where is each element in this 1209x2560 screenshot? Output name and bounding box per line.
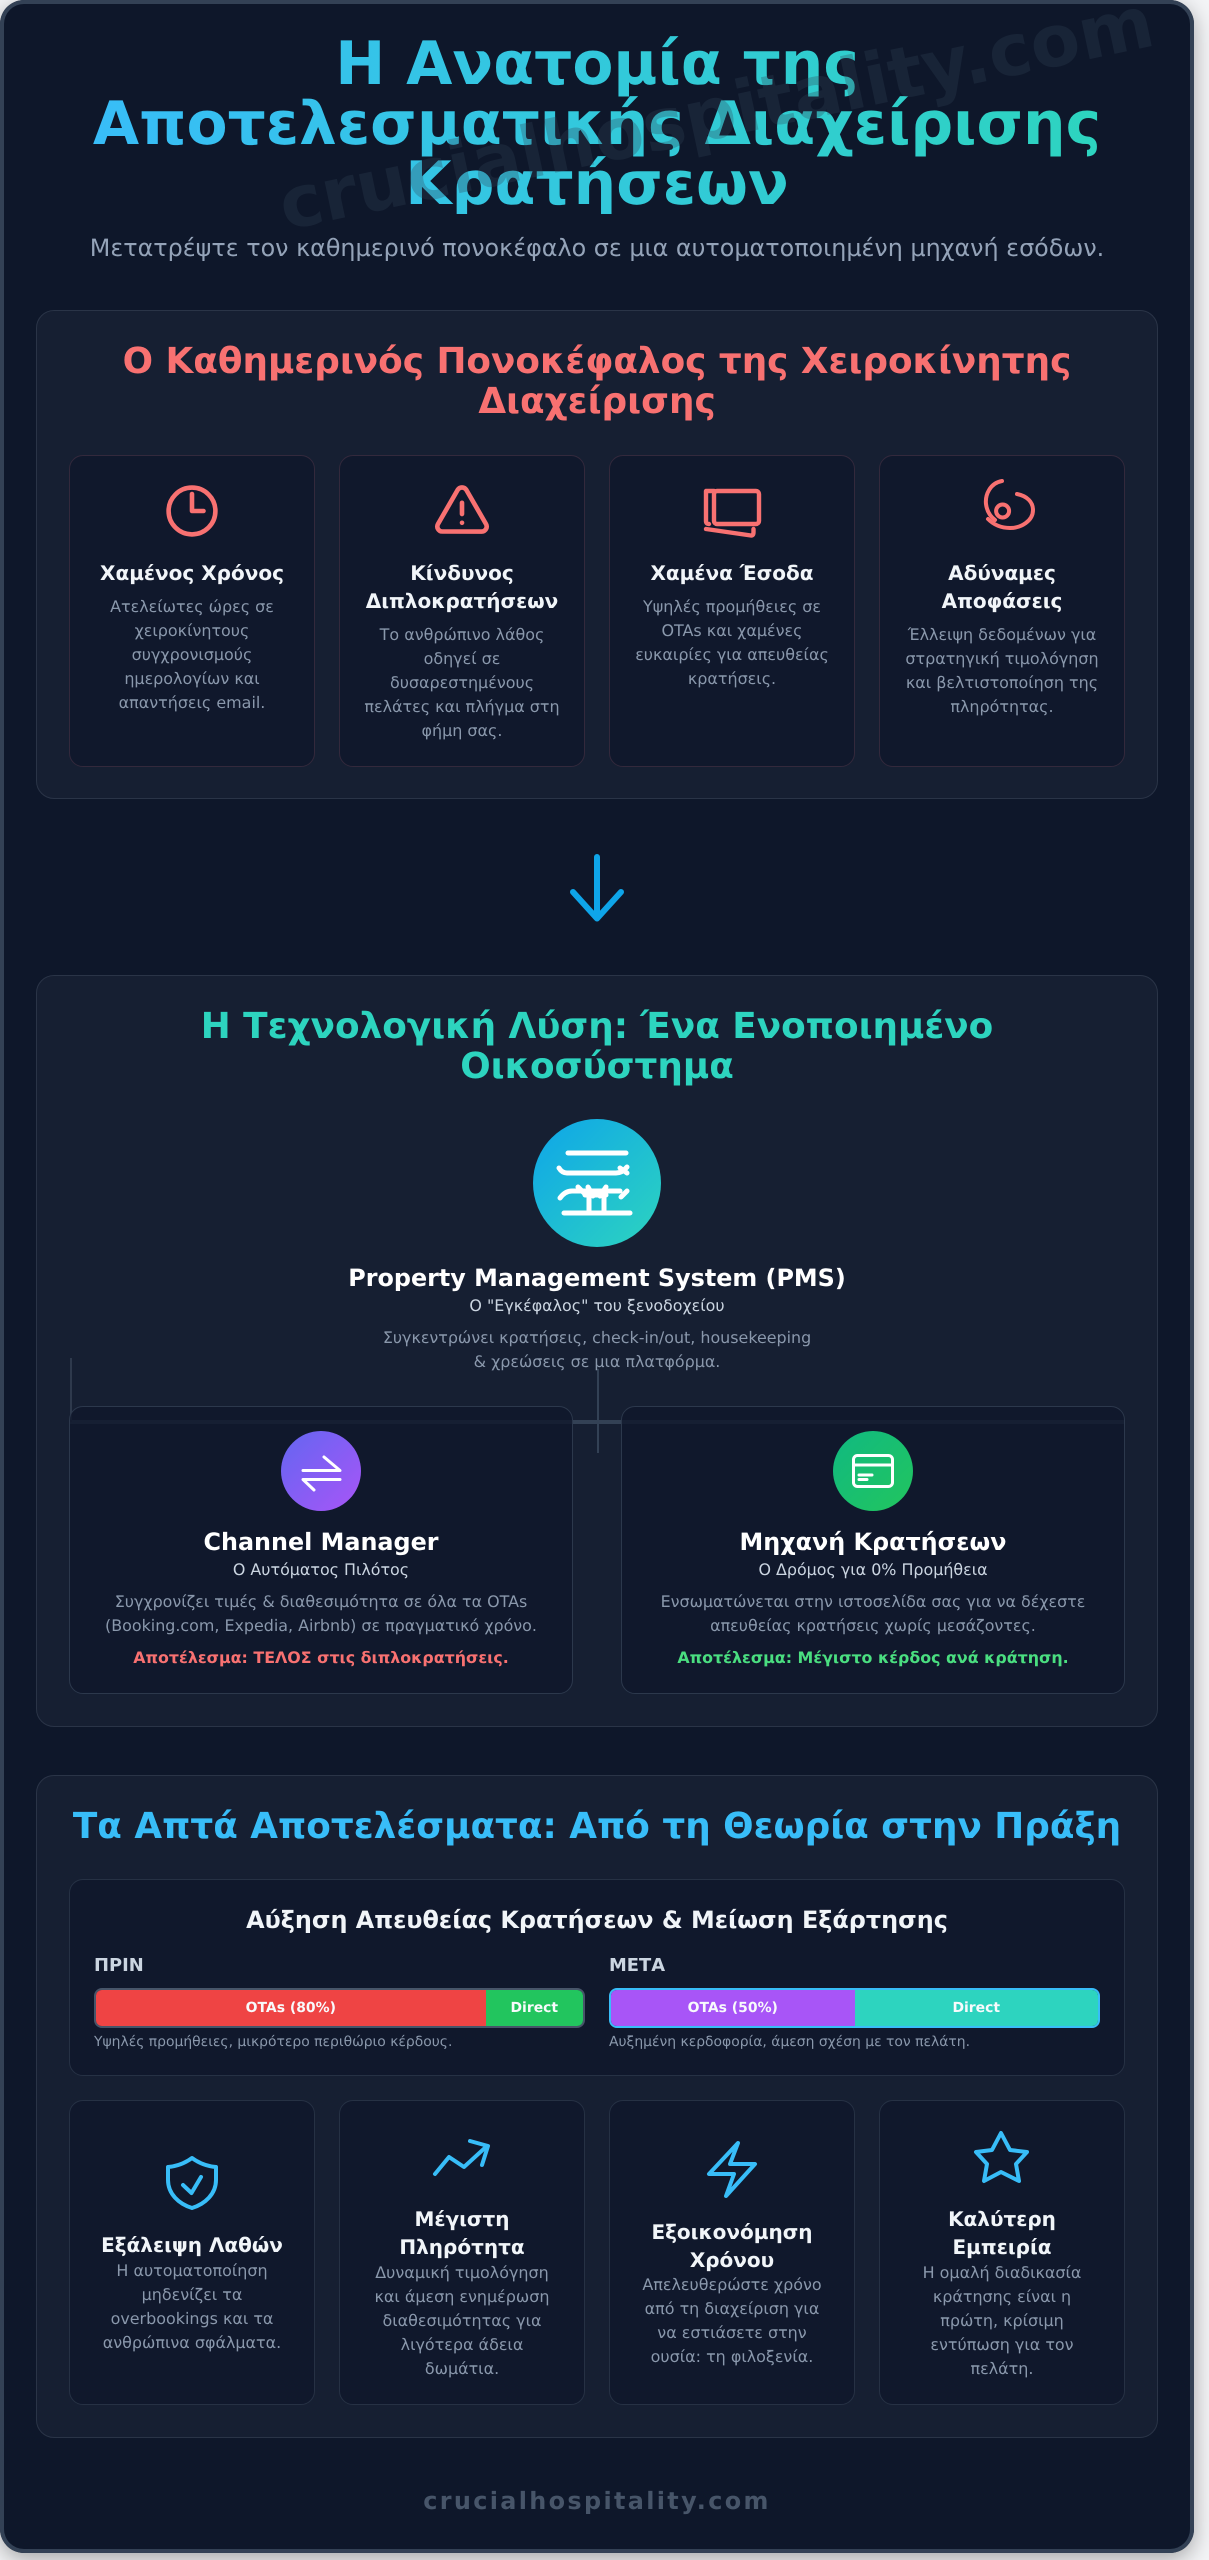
icon: stacked notes: [704, 488, 762, 538]
channel manager description: (Booking.com, Expedia, Airbnb) σε πραγματικό χρόνο.: [105, 1616, 537, 1635]
heading: tangible results: Τα Απτά Αποτελέσματα: Από τη Θεωρία στην Πράξη: [73, 1806, 1121, 1847]
card text: να εστιάσετε στην: [657, 2323, 807, 2342]
heading: technology solution: Οικοσύστημα: [460, 1046, 734, 1087]
card text: οδηγεί σε: [424, 649, 500, 668]
icon: shield check: [166, 2156, 218, 2210]
card text: [103, 2261, 281, 2352]
PMS description: Συγκεντρώνει κρατήσεις, check-in/out, housekeeping: [383, 1328, 811, 1347]
card text: ανθρώπινα σφάλματα.: [103, 2333, 281, 2352]
icon: warning triangle: [435, 485, 489, 534]
header title: Κρατήσεων: [405, 149, 789, 219]
card text: στρατηγική τιμολόγηση: [905, 649, 1099, 668]
connector: center vertical line: [597, 1369, 599, 1453]
header title: Η Ανατομία της: [335, 29, 859, 99]
icon: star: [974, 2130, 1029, 2184]
arrow: down to solution: [570, 854, 624, 922]
icon: clock: [166, 485, 218, 537]
card text: [364, 625, 560, 740]
card text: μηδενίζει τα: [142, 2285, 242, 2304]
card: chart before and after: [69, 1879, 1125, 2076]
card text: πρώτη, κρίσιμη: [940, 2311, 1064, 2330]
card text: Έλλειψη δεδομένων για: [908, 625, 1096, 644]
card text: ουσία: τη φιλοξενία.: [651, 2347, 813, 2366]
card text: συγχρονισμούς: [132, 645, 252, 664]
card title: Διπλοκρατήσεων: [366, 589, 558, 613]
panel: tangible results: [36, 1775, 1158, 2438]
card title: Καλύτερη: [948, 2207, 1056, 2231]
card text: [110, 597, 274, 712]
icon: spiral target: [984, 479, 1035, 530]
PMS description: & χρεώσεις σε μια πλατφόρμα.: [474, 1352, 720, 1371]
card text: ημερολογίων και: [124, 669, 260, 688]
card text: δυσαρεστημένους: [390, 673, 534, 692]
card text: Υψηλές προμήθειες σε: [643, 597, 821, 616]
channel manager description: [105, 1592, 537, 1635]
card title: Χαμένα Έσοδα: [650, 561, 814, 585]
channel manager result: Αποτέλεσμα: ΤΕΛΟΣ στις διπλοκρατήσεις.: [133, 1648, 509, 1667]
card text: ευκαιρίες για απευθείας: [635, 645, 829, 664]
booking engine title: Μηχανή Κρατήσεων: [740, 1528, 1006, 1556]
card title: Μέγιστη: [414, 2207, 510, 2231]
icon: lightning bolt: [706, 2141, 758, 2198]
card text: [923, 2263, 1081, 2378]
icon: credit card: [833, 1431, 913, 1511]
stacked bar: after: [609, 1988, 1100, 2028]
card title: [651, 2220, 813, 2272]
card text: OTAs και χαμένες: [661, 621, 802, 640]
card text: Ατελείωτες ώρες σε: [110, 597, 274, 616]
card: lost time: [69, 455, 315, 767]
stacked bar: before: [94, 1988, 585, 2028]
card text: φήμη σας.: [422, 721, 502, 740]
channel manager subtitle: Ο Αυτόματος Πιλότος: [233, 1560, 409, 1579]
card text: Η ομαλή διαδικασία: [923, 2263, 1081, 2282]
card text: πληρότητας.: [950, 697, 1054, 716]
booking engine description: [661, 1592, 1085, 1635]
icon: swap arrows: [281, 1431, 361, 1511]
card: eliminate errors: [69, 2100, 315, 2405]
heading: technology solution: Η Τεχνολογική Λύση: Ένα Ενοποιημένο: [201, 1006, 993, 1047]
card text: και άμεση ενημέρωση: [375, 2287, 549, 2306]
card text: [905, 625, 1099, 716]
card text: κράτησης είναι η: [933, 2287, 1071, 2306]
heading: daily headache: Ο Καθημερινός Πονοκέφαλος της Χειροκίνητης: [123, 341, 1071, 382]
panel: daily headache: [36, 310, 1158, 799]
label: after: ΜΕΤΑ: [609, 1955, 665, 1976]
card text: και βελτιστοποίηση της: [906, 673, 1098, 692]
card: better experience: [879, 2100, 1125, 2405]
card: double-booking risk: [339, 455, 585, 767]
card title: Χρόνου: [690, 2248, 774, 2272]
stacked bar: after: Direct: [952, 2000, 1000, 2016]
channel manager title: Channel Manager: [203, 1528, 439, 1556]
card: channel manager: [69, 1406, 573, 1694]
card text: Το ανθρώπινο λάθος: [380, 625, 544, 644]
header title: [36, 34, 1158, 214]
card: lost revenue: [609, 455, 855, 767]
card text: απαντήσεις email.: [119, 693, 265, 712]
card text: [642, 2275, 822, 2366]
booking engine subtitle: Ο Δρόμος για 0% Προμήθεια: [758, 1560, 988, 1579]
card text: Η αυτοματοποίηση: [116, 2261, 268, 2280]
label: before: ΠΡΙΝ: [94, 1955, 144, 1976]
subtitle: Μετατρέψτε τον καθημερινό πονοκέφαλο σε μια αυτοματοποιημένη μηχανή εσόδων.: [90, 234, 1104, 262]
PMS title: Property Management System (PMS): [348, 1264, 846, 1292]
card: weak decisions: [879, 455, 1125, 767]
channel manager description: Συγχρονίζει τιμές & διαθεσιμότητα σε όλα τα OTAs: [115, 1592, 527, 1611]
icon: PMS circle: [533, 1119, 661, 1247]
card text: Δυναμική τιμολόγηση: [375, 2263, 549, 2282]
card: time saving: [609, 2100, 855, 2405]
card title: [942, 561, 1062, 613]
card text: Απελευθερώστε χρόνο: [642, 2275, 822, 2294]
card title: Εξοικονόμηση: [651, 2220, 813, 2244]
caption: before: Υψηλές προμήθειες, μικρότερο περιθώριο κέρδους.: [94, 2034, 452, 2050]
card text: [635, 597, 829, 688]
heading: daily headache: Διαχείρισης: [478, 381, 716, 422]
footer: site name: crucialhospitality.com: [423, 2487, 771, 2515]
card title: Αδύναμες: [948, 561, 1056, 585]
card text: χειροκίνητους: [135, 621, 249, 640]
card title: Εμπειρία: [952, 2235, 1051, 2259]
card title: Χαμένος Χρόνος: [100, 561, 284, 585]
card text: κρατήσεις.: [688, 669, 776, 688]
card text: εντύπωση για τον: [930, 2335, 1074, 2354]
card text: πελάτες και πλήγμα στη: [364, 697, 560, 716]
card title: [399, 2207, 525, 2259]
card text: λιγότερα άδεια: [401, 2335, 523, 2354]
card text: δωμάτια.: [425, 2359, 499, 2378]
card title: Εξάλειψη Λαθών: [101, 2233, 283, 2257]
card text: διαθεσιμότητας για: [383, 2311, 541, 2330]
card title: Αποφάσεις: [942, 589, 1062, 613]
stacked bar: before: OTAs (80%): [246, 2000, 336, 2016]
card: maximum occupancy: [339, 2100, 585, 2405]
header title: Αποτελεσματικής Διαχείρισης: [93, 89, 1101, 159]
PMS subtitle: Ο "Εγκέφαλος" του ξενοδοχείου: [469, 1296, 725, 1315]
card title: Πληρότητα: [399, 2235, 525, 2259]
booking engine description: Ενσωματώνεται στην ιστοσελίδα σας για να δέχεστε: [661, 1592, 1085, 1611]
booking engine result: Αποτέλεσμα: Μέγιστο κέρδος ανά κράτηση.: [677, 1648, 1069, 1667]
card text: [375, 2263, 549, 2378]
card text: πελάτη.: [971, 2359, 1033, 2378]
connector: horizontal line: [69, 1420, 1125, 1424]
heading: technology solution: [201, 1006, 993, 1087]
card text: overbookings και τα: [111, 2309, 273, 2328]
card title: [948, 2207, 1056, 2259]
card title: [366, 561, 558, 613]
heading: daily headache: [123, 341, 1071, 422]
booking engine description: απευθείας κρατήσεις χωρίς μεσάζοντες.: [710, 1616, 1036, 1635]
card text: από τη διαχείριση για: [645, 2299, 819, 2318]
icon: trending up: [432, 2139, 490, 2176]
PMS description: [383, 1328, 811, 1371]
stacked bar: after: OTAs (50%): [688, 2000, 778, 2016]
chart title: Αύξηση Απευθείας Κρατήσεων & Μείωση Εξάρτησης: [246, 1906, 948, 1934]
panel: technology solution: [36, 975, 1158, 1727]
card: booking engine: [621, 1406, 1125, 1694]
caption: after: Αυξημένη κερδοφορία, άμεση σχέση με τον πελάτη.: [609, 2034, 970, 2050]
stacked bar: before: Direct: [510, 2000, 558, 2016]
connector: left vertical line: [70, 1358, 72, 1422]
card title: Κίνδυνος: [410, 561, 514, 585]
